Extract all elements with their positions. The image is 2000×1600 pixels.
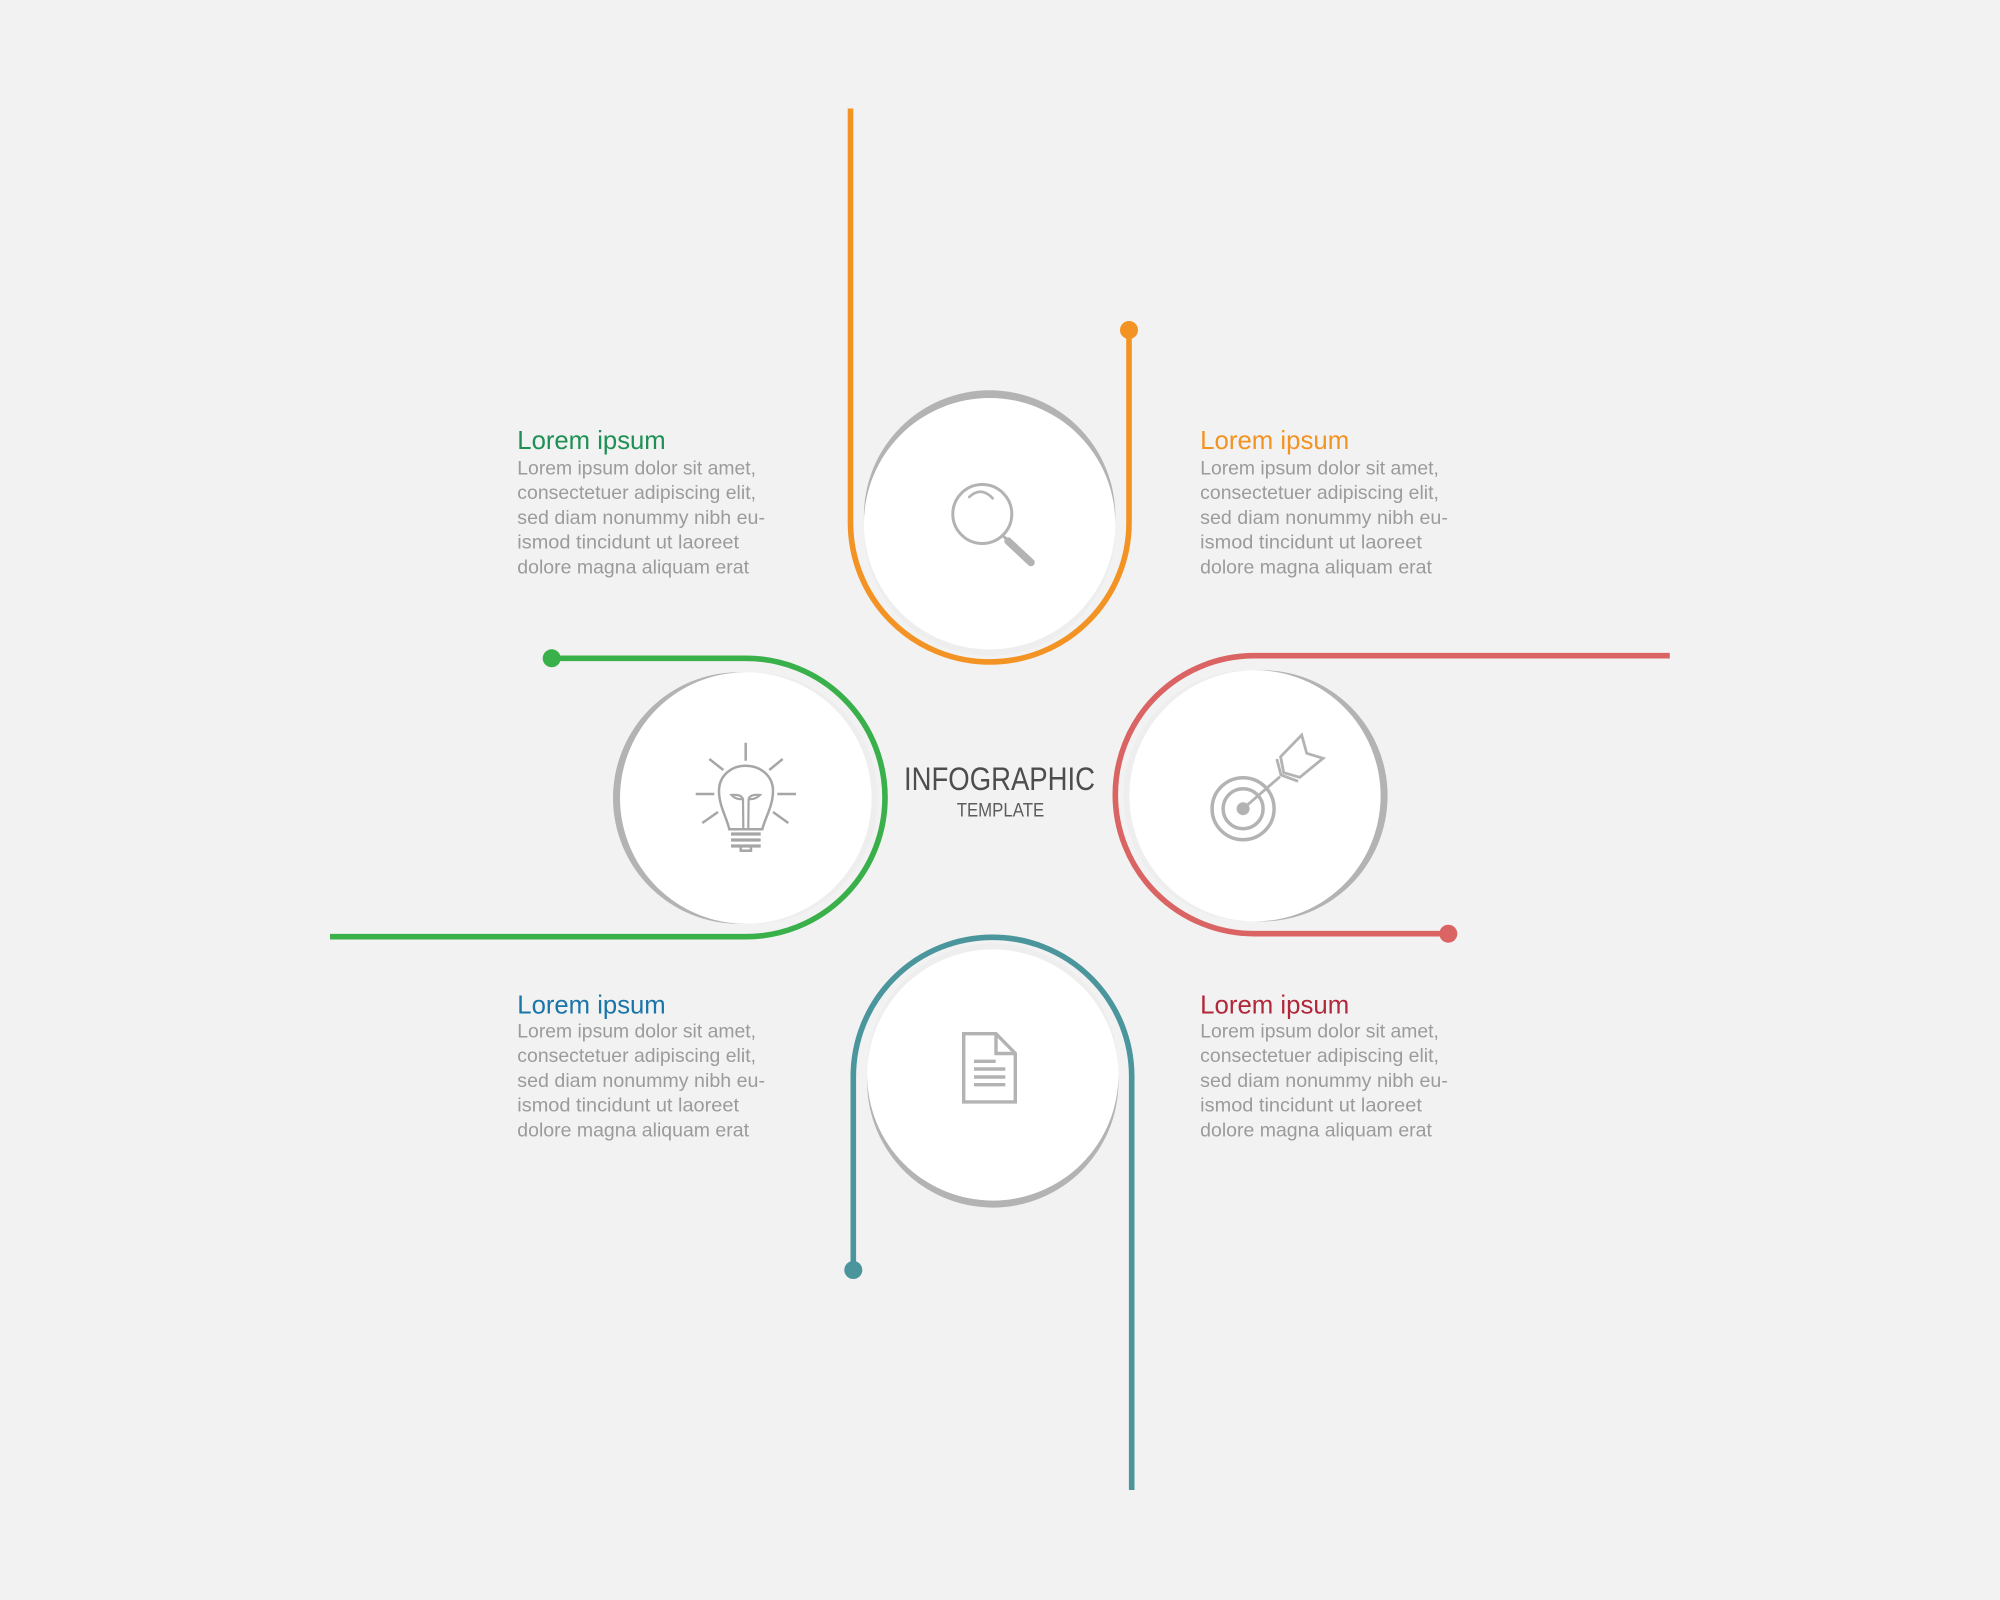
body copy: ismod tincidunt ut laoreet	[517, 1095, 740, 1117]
body copy: sed diam nonummy nibh eu-	[517, 1070, 765, 1092]
panel: teal document step	[844, 937, 1132, 1490]
body copy	[517, 1020, 765, 1141]
red end dot	[1439, 925, 1457, 943]
green connector line	[330, 658, 885, 937]
body copy: dolore magna aliquam erat	[1200, 556, 1433, 578]
body copy: sed diam nonummy nibh eu-	[1200, 507, 1448, 529]
body copy	[1200, 1020, 1448, 1141]
body copy: ismod tincidunt ut laoreet	[517, 532, 740, 554]
panel: orange search step	[850, 108, 1138, 662]
icon: magnifying glass	[953, 484, 1031, 562]
green end dot	[543, 649, 561, 667]
body copy: Lorem ipsum dolor sit amet,	[517, 1020, 756, 1042]
red circle shadow	[1136, 670, 1388, 921]
heading: Lorem ipsum	[517, 427, 666, 455]
body copy: dolore magna aliquam erat	[517, 1119, 750, 1141]
body copy: sed diam nonummy nibh eu-	[1200, 1070, 1448, 1092]
body copy: consectetuer adipiscing elit,	[1200, 482, 1439, 504]
panel: green idea step	[330, 649, 885, 937]
orange white disc	[864, 398, 1115, 649]
subtitle: TEMPLATE	[957, 800, 1044, 822]
green circle soft ring	[626, 672, 878, 924]
main title: INFOGRAPHIC	[904, 761, 1095, 797]
green circle shadow	[613, 672, 865, 924]
text block: top left green	[517, 427, 765, 578]
text block: bottom right red	[1200, 992, 1448, 1141]
body copy: Lorem ipsum dolor sit amet,	[517, 457, 756, 479]
body copy	[1200, 457, 1448, 578]
icon: target with arrow	[1212, 735, 1323, 840]
orange end dot	[1120, 321, 1138, 339]
teal circle shadow	[867, 956, 1118, 1208]
teal connector line	[853, 937, 1132, 1490]
body copy: ismod tincidunt ut laoreet	[1200, 532, 1423, 554]
center title	[904, 761, 1095, 822]
body copy: ismod tincidunt ut laoreet	[1200, 1095, 1423, 1117]
red circle soft ring	[1123, 670, 1375, 921]
body copy: Lorem ipsum dolor sit amet,	[1200, 1020, 1439, 1042]
heading: Lorem ipsum	[1200, 992, 1349, 1020]
body copy: Lorem ipsum dolor sit amet,	[1200, 457, 1439, 479]
heading: Lorem ipsum	[1200, 427, 1349, 455]
panel: red target step	[1115, 656, 1670, 943]
red white disc	[1129, 670, 1381, 921]
body copy: consectetuer adipiscing elit,	[517, 1045, 756, 1067]
teal circle soft ring	[867, 943, 1118, 1195]
text block: bottom left blue	[517, 992, 765, 1141]
body copy: consectetuer adipiscing elit,	[517, 482, 756, 504]
teal white disc	[867, 949, 1118, 1201]
orange connector line	[850, 108, 1129, 662]
heading: Lorem ipsum	[517, 992, 666, 1020]
orange circle shadow	[864, 390, 1115, 642]
body copy	[517, 457, 765, 578]
red connector line	[1115, 656, 1670, 934]
icon: document	[964, 1034, 1015, 1102]
teal end dot	[844, 1261, 862, 1279]
body copy: dolore magna aliquam erat	[1200, 1119, 1433, 1141]
text block: top right orange	[1200, 427, 1448, 578]
icon: light bulb	[696, 743, 796, 851]
orange circle soft ring	[864, 404, 1115, 656]
green white disc	[620, 672, 872, 924]
body copy: dolore magna aliquam erat	[517, 556, 750, 578]
body copy: consectetuer adipiscing elit,	[1200, 1045, 1439, 1067]
body copy: sed diam nonummy nibh eu-	[517, 507, 765, 529]
